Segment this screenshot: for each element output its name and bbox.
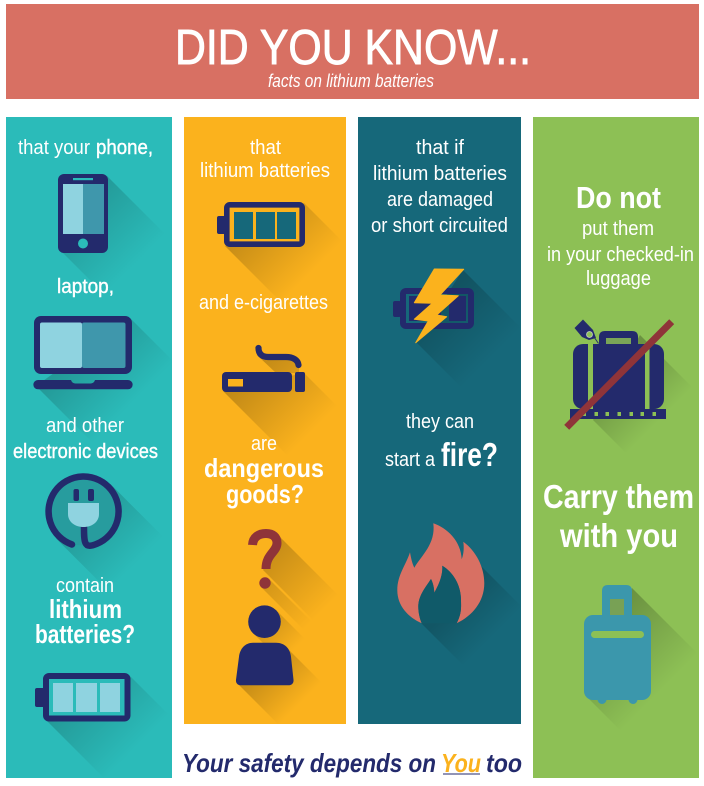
- icon shadow: plug: [56, 484, 149, 578]
- text: that if: that if: [416, 137, 464, 159]
- title: DID YOU KNOW...: [175, 21, 531, 75]
- text: are damaged: are damaged: [387, 189, 493, 211]
- text: start a fire: fire?: [441, 436, 498, 473]
- panel: damaged batteries can start a fire: [358, 117, 521, 724]
- text: or short circuited: or short circuited: [371, 215, 508, 237]
- icon shadow: phone: [63, 176, 150, 280]
- icon shadow: person body: [239, 650, 316, 719]
- icon: flame: [397, 523, 484, 623]
- text: goods: goods?: [226, 479, 304, 509]
- icon shadow: person head: [254, 610, 299, 646]
- text: and e-cigarettes: and e-cigarettes: [199, 292, 328, 314]
- text: laptop: laptop,: [57, 276, 114, 298]
- subtitle: facts on lithium batteries: [268, 71, 434, 91]
- icon: laptop: [33, 316, 133, 389]
- text: are: are: [251, 433, 277, 455]
- panel: dangerous goods: [184, 117, 346, 724]
- text: with you: with you: [559, 517, 678, 554]
- text: dangerous: dangerous: [204, 453, 324, 483]
- footer tagline: Your safety depends on: [182, 748, 436, 778]
- icon shadow: battery: [225, 203, 334, 293]
- icon: phone: [58, 174, 108, 253]
- text: put them: put them: [582, 218, 654, 240]
- icon shadow: carry-on luggage: [590, 588, 686, 719]
- footer tagline: You: [441, 748, 481, 778]
- icon: carry-on luggage: [584, 585, 651, 704]
- icon shadow: laptop: [40, 318, 160, 429]
- icon shadow: battery: [48, 676, 154, 764]
- icon: prohibition slash: [567, 322, 672, 427]
- text: luggage: luggage: [586, 268, 651, 290]
- text: batteries: batteries?: [35, 619, 135, 649]
- icon: cigarette: [222, 348, 305, 392]
- text: that your phone: [18, 137, 153, 159]
- icon: battery: [217, 205, 302, 244]
- text: lithium: lithium: [49, 594, 122, 624]
- icon: damaged battery with lightning bolt: [393, 269, 471, 343]
- text: they can: they can: [406, 411, 474, 433]
- text: that: that: [250, 137, 281, 159]
- footer tagline: too: [486, 748, 522, 778]
- icon: person: [236, 605, 294, 685]
- icon: question mark: [252, 534, 277, 589]
- icon shadow: flame: [421, 566, 508, 651]
- text: start a fire: [385, 436, 498, 473]
- icon shadow: question dot: [261, 579, 302, 620]
- icon: suitcase on conveyor, crossed out: [567, 320, 672, 427]
- panel: devices containing lithium batteries: [6, 117, 172, 778]
- text: electronic devices: electronic devices: [13, 441, 158, 463]
- icon shadow: cigarette smoke: [258, 355, 299, 373]
- text: lithium batteries: lithium batteries: [373, 163, 507, 185]
- icon: plug: [49, 476, 119, 546]
- text: that your phone: that your: [18, 137, 90, 159]
- icon shadow: question mark: [263, 538, 329, 611]
- text: and other: and other: [46, 415, 124, 437]
- icon shadow: suitcase: [593, 335, 684, 444]
- panel: do not check in, carry them: [533, 117, 704, 786]
- header banner: [6, 4, 699, 99]
- icon shadow: damaged battery: [416, 270, 502, 369]
- icon shadow: cigarette: [223, 374, 328, 446]
- icon: battery: [35, 676, 128, 718]
- text: lithium batteries: lithium batteries: [200, 160, 330, 182]
- text: contain: contain: [56, 575, 114, 597]
- text: do not: Do not: [576, 180, 661, 215]
- text: that your phone: phone,: [96, 137, 153, 159]
- icon: lightning bolt: [414, 269, 464, 343]
- text: start a fire: start a: [385, 449, 436, 471]
